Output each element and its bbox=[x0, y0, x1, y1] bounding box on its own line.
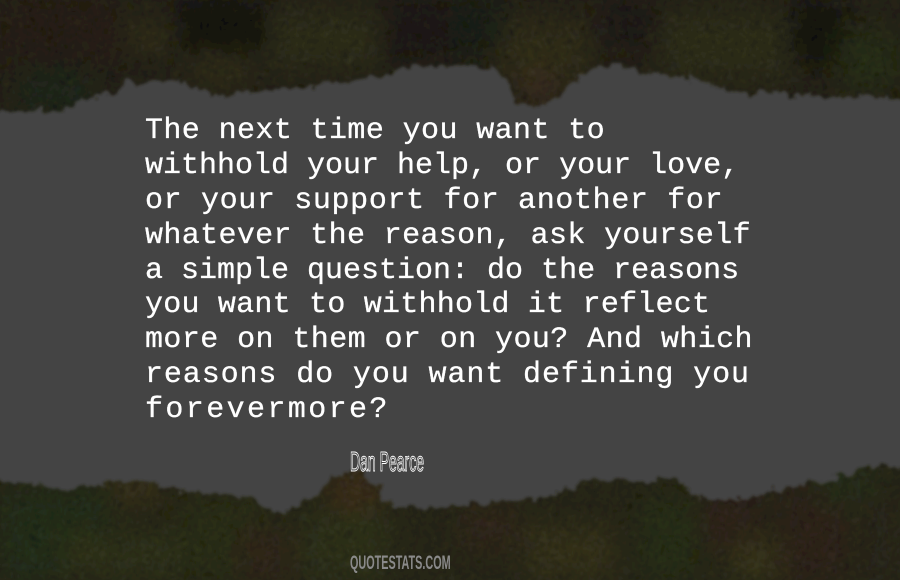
quote text: reasons do you want defining you bbox=[145, 358, 750, 392]
quote text: or your support for another for bbox=[145, 184, 723, 218]
site watermark: QUOTESTATS.COM bbox=[350, 553, 451, 574]
author name: Dan Pearce bbox=[350, 446, 424, 477]
quote text: forevermore? bbox=[145, 393, 390, 427]
quote text: you want to withhold it reflect bbox=[145, 288, 710, 322]
forest band: top bbox=[0, 0, 900, 120]
quote text: whatever the reason, ask yourself bbox=[145, 219, 751, 253]
quote text: The next time you want to bbox=[145, 114, 605, 148]
quote text: withhold your help, or your love, bbox=[145, 149, 739, 183]
quote text bbox=[145, 114, 753, 427]
forest band: bottom bbox=[0, 460, 900, 580]
quote text: a simple question: do the reasons bbox=[145, 254, 739, 288]
quote text: more on them or on you? And which bbox=[145, 323, 753, 357]
